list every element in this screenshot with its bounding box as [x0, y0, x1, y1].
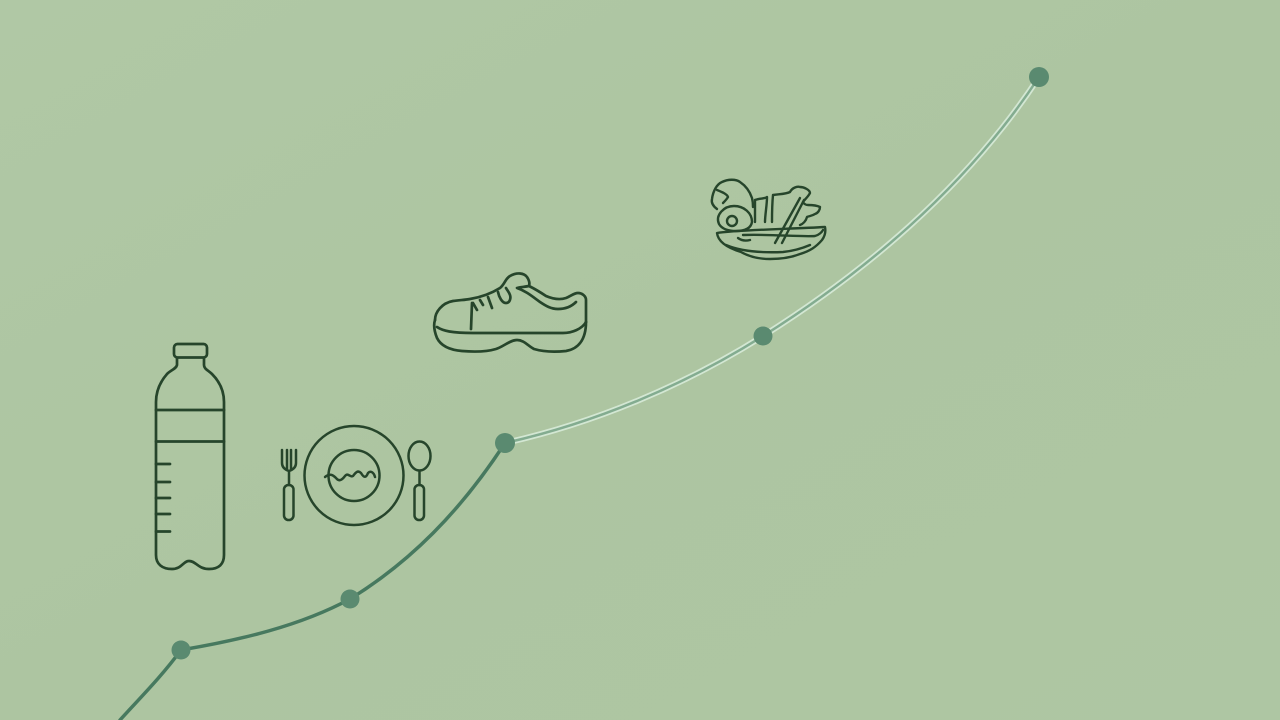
plate: [304, 426, 404, 525]
icon: plate with fork and spoon: [282, 426, 430, 525]
greens: [755, 187, 820, 225]
fork: [282, 450, 296, 485]
curve: lower dark segment: [120, 443, 505, 720]
curve: upper light segment: [505, 77, 1039, 443]
laces: [471, 297, 492, 329]
collar: [517, 286, 576, 309]
icon: shoe: [434, 273, 586, 352]
chopsticks: [775, 198, 804, 243]
egg and tomato: [712, 180, 753, 209]
data point 5: [1029, 67, 1049, 87]
upper: [435, 273, 586, 322]
data point 3: [495, 433, 515, 453]
sole line: [437, 322, 586, 333]
data point 4: [754, 326, 772, 346]
data point 2: [340, 590, 360, 608]
rising line chart: [120, 67, 1049, 720]
icon: salad bowl: [712, 180, 825, 259]
data point 1: [172, 640, 190, 660]
sole: [434, 320, 586, 352]
bowl: [717, 227, 825, 259]
spoon: [408, 442, 430, 470]
icon: water bottle: [156, 344, 224, 569]
